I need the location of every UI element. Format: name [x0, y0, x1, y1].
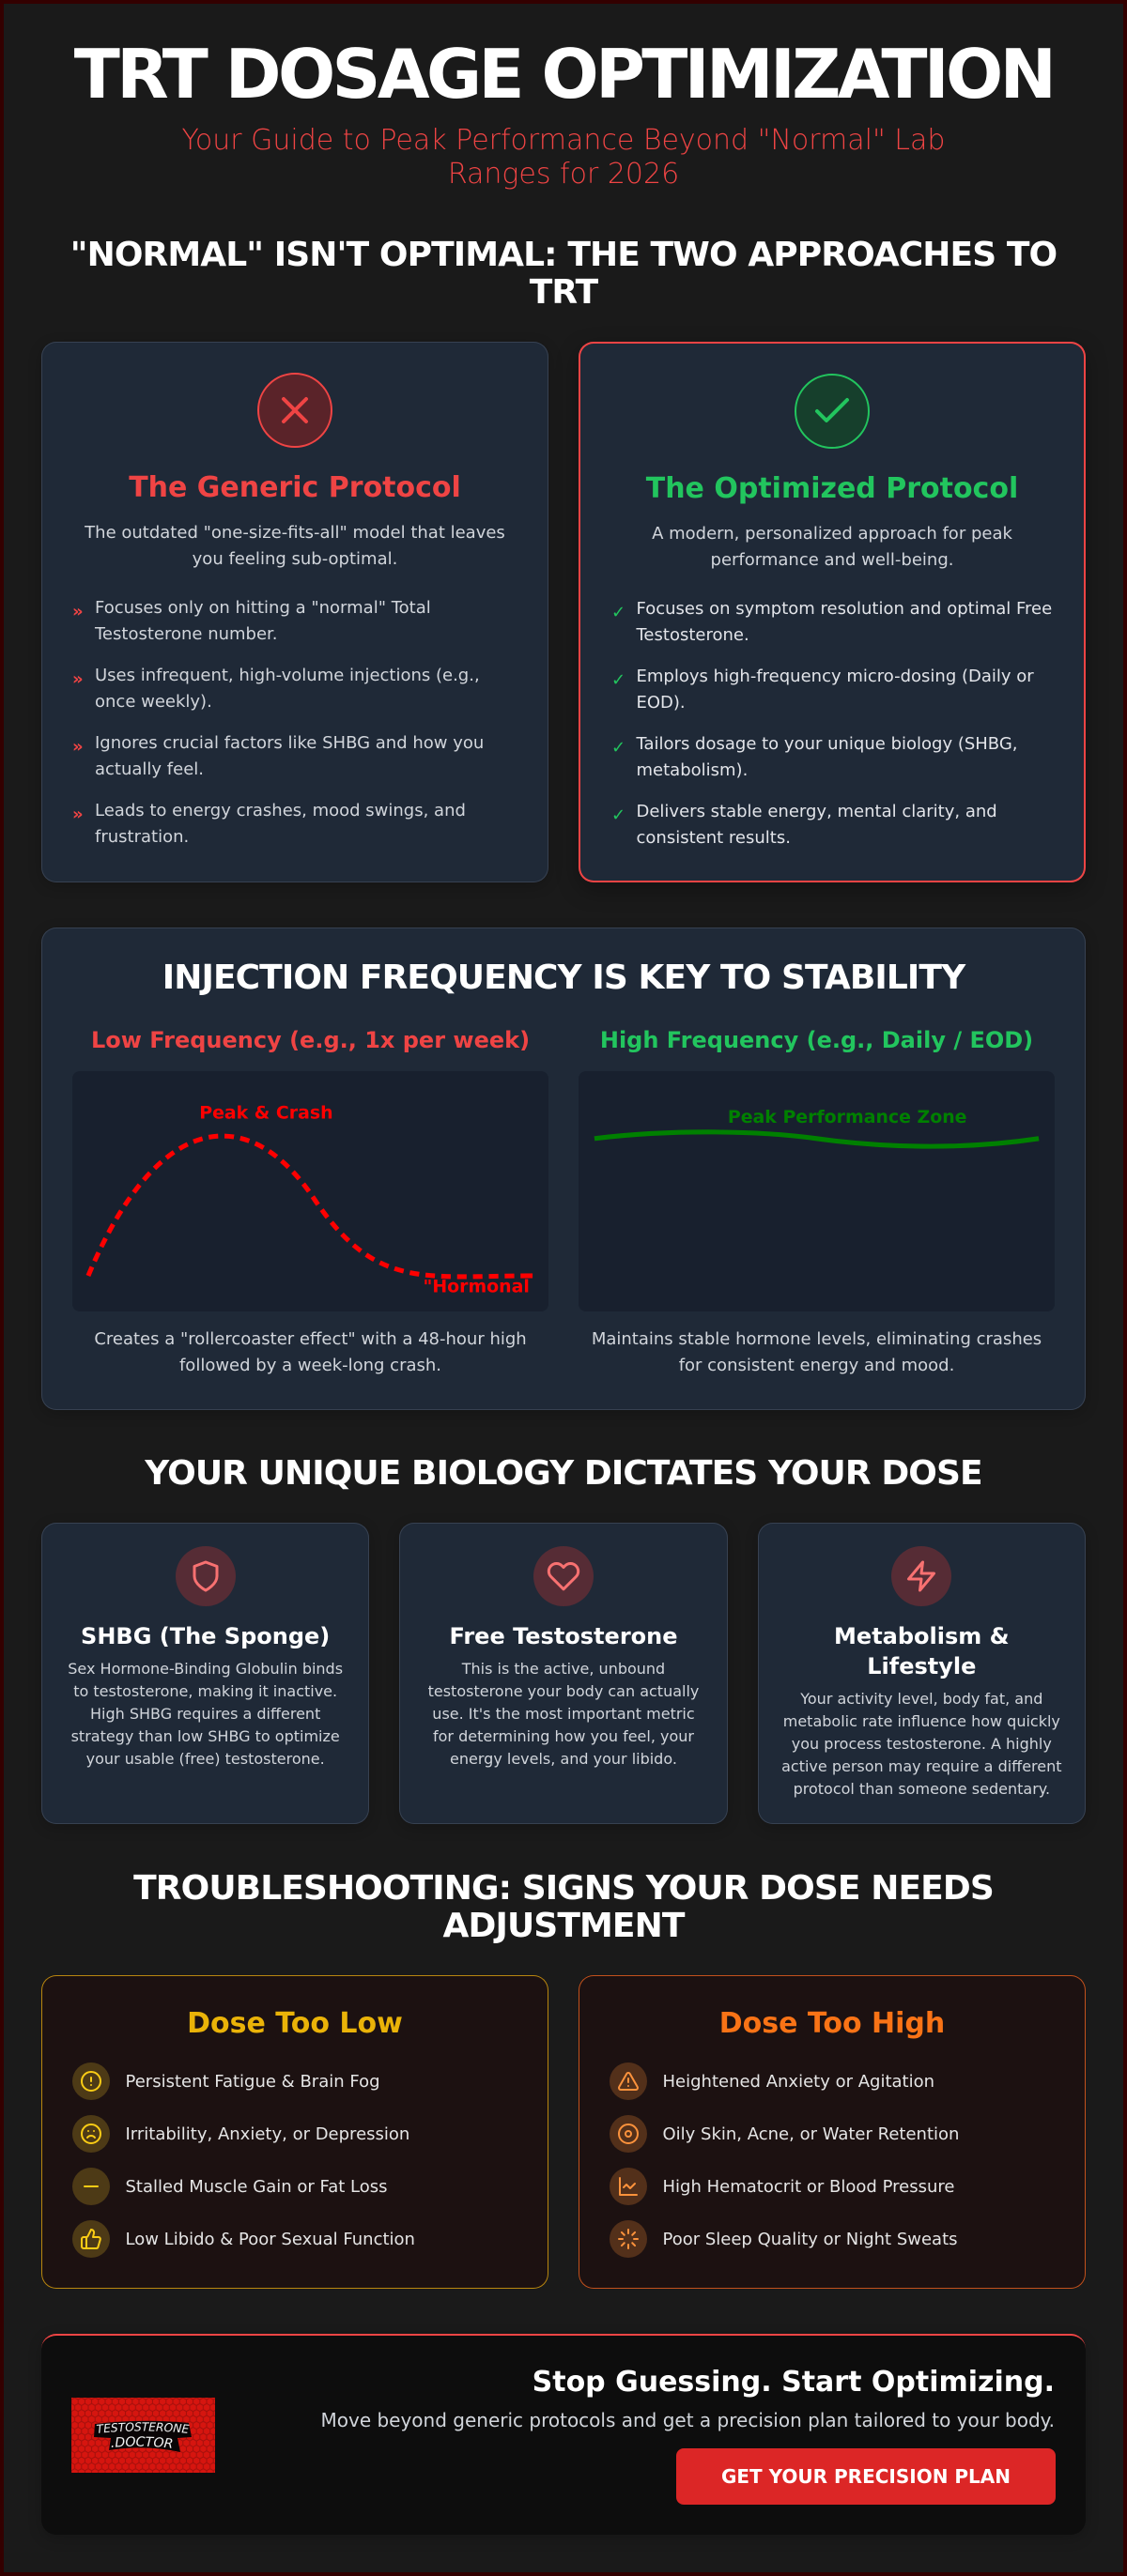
symptom: hematocrit: High Hematocrit or Blood Pressure	[663, 2177, 954, 2197]
caption: low frequency	[94, 1329, 527, 1375]
panel: free testosterone	[399, 1523, 728, 1824]
check 4	[611, 802, 997, 848]
text: metabolism	[781, 1690, 1062, 1798]
caption: low frequency: Creates a "rollercoaster effect" with a 48-hour high	[94, 1329, 527, 1349]
text: SHBG	[68, 1660, 343, 1768]
chart: low frequency peak and crash: Peak & Crash	[199, 1103, 333, 1124]
panel: call to action	[41, 2334, 1086, 2535]
text: SHBG: High SHBG requires a different	[90, 1705, 320, 1723]
heading: dose too high: Dose Too High	[719, 2007, 945, 2040]
button: get your precision plan: GET YOUR PRECISION PLAN	[721, 2465, 1011, 2488]
icon: frown	[72, 2115, 110, 2153]
bullet 1: Focuses only on hitting a "normal" Total	[95, 598, 431, 618]
logo: testosterone doctor: TESTOSTERONE	[96, 2422, 190, 2433]
text: free testosterone: energy levels, and your libido.	[450, 1750, 677, 1768]
heading: high frequency: High Frequency (e.g., Daily / EOD)	[600, 1027, 1033, 1053]
symptom: fatigue	[72, 2062, 380, 2100]
caption: high frequency: for consistent energy and mood.	[679, 1356, 954, 1375]
check 3: metabolism).	[637, 760, 748, 780]
text: metabolism: active person may require a different	[781, 1757, 1062, 1775]
icon: minus	[72, 2168, 110, 2205]
icon: shield	[176, 1546, 236, 1606]
heading: dose too low: Dose Too Low	[187, 2007, 403, 2040]
check 2	[611, 667, 1034, 713]
icon: disc	[610, 2115, 647, 2153]
symptom: poor sleep: Poor Sleep Quality or Night Sweats	[663, 2230, 958, 2249]
panel: dose too low	[41, 1975, 548, 2289]
check 1	[611, 599, 1052, 645]
heading: two approaches: TRT	[530, 273, 597, 312]
subtitle: Ranges for 2026	[448, 158, 679, 191]
check 1: Focuses on symptom resolution and optimal Free	[637, 599, 1052, 619]
panel: optimized protocol	[579, 342, 1086, 882]
check 1: Testosterone.	[637, 625, 749, 645]
icon: loader burst	[610, 2220, 647, 2258]
check 2: EOD).	[637, 693, 686, 713]
check 3	[611, 734, 1018, 780]
symptom: hematocrit	[610, 2168, 954, 2205]
check 1: ✓	[611, 603, 625, 622]
check 4: consistent results.	[637, 828, 791, 848]
bullet 2	[72, 666, 480, 712]
description: generic protocol: The outdated "one-size-fits-all" model that leaves	[85, 523, 505, 543]
check 4: Delivers stable energy, mental clarity, and	[637, 802, 997, 821]
heading: troubleshooting: TROUBLESHOOTING: SIGNS YOUR DOSE NEEDS	[133, 1869, 994, 1908]
heading: metabolism	[834, 1623, 1010, 1679]
heading: generic protocol: The Generic Protocol	[129, 471, 461, 503]
text: SHBG: Sex Hormone-Binding Globulin binds	[68, 1660, 343, 1678]
symptom: irritability	[72, 2115, 409, 2153]
icon: thumbs up	[72, 2220, 110, 2258]
heading: troubleshooting	[133, 1869, 994, 1945]
list: optimized protocol points	[611, 599, 1052, 848]
description: generic protocol: you feeling sub-optimal.	[193, 549, 397, 569]
panel: metabolism	[758, 1523, 1086, 1824]
symptom: anxiety	[610, 2062, 934, 2100]
bullet 1: »	[72, 602, 84, 621]
heading: metabolism: Lifestyle	[867, 1653, 976, 1679]
logo: testosterone doctor	[71, 2398, 215, 2473]
bullet 3	[72, 733, 484, 779]
panel: generic protocol	[41, 342, 548, 882]
heading: optimized protocol: The Optimized Protocol	[646, 471, 1018, 505]
icon: red cross	[257, 373, 332, 448]
symptom: oily skin: Oily Skin, Acne, or Water Retention	[663, 2124, 959, 2144]
symptom: fatigue: Persistent Fatigue & Brain Fog	[126, 2072, 380, 2092]
heading: SHBG: SHBG (The Sponge)	[81, 1623, 330, 1649]
check 2: ✓	[611, 670, 625, 690]
description: optimized protocol: A modern, personalized approach for peak	[652, 524, 1012, 544]
bullet 4: »	[72, 805, 84, 824]
heading: two approaches: "NORMAL" ISN'T OPTIMAL: THE TWO APPROACHES TO	[70, 236, 1057, 274]
heading: call to action: Stop Guessing. Start Optimizing.	[533, 2366, 1055, 2399]
bullet 4: frustration.	[95, 827, 189, 847]
text: metabolism: metabolic rate influence how quickly	[783, 1712, 1060, 1730]
panel: injection frequency	[41, 928, 1086, 1410]
icon: alert circle	[72, 2062, 110, 2100]
heading: low frequency: Low Frequency (e.g., 1x per week)	[91, 1027, 530, 1053]
panel: SHBG	[41, 1523, 369, 1824]
text: free testosterone	[428, 1660, 699, 1768]
symptom: low libido	[72, 2220, 415, 2258]
text: metabolism: you process testosterone. A highly	[792, 1735, 1052, 1753]
bullet 4	[72, 801, 466, 847]
symptom: oily skin	[610, 2115, 959, 2153]
icon: warning triangle	[610, 2062, 647, 2100]
symptom: low libido: Low Libido & Poor Sexual Function	[126, 2230, 415, 2249]
title: TRT DOSAGE OPTIMIZATION	[74, 35, 1053, 114]
list: generic protocol points	[72, 598, 484, 847]
bullet 3: actually feel.	[95, 759, 204, 779]
check 4: ✓	[611, 805, 625, 825]
subtitle	[182, 124, 945, 191]
symptom: irritability: Irritability, Anxiety, or Depression	[126, 2124, 409, 2144]
heading: unique biology: YOUR UNIQUE BIOLOGY DICTATES YOUR DOSE	[145, 1454, 982, 1493]
description: generic protocol	[85, 523, 505, 569]
symptom: anxiety: Heightened Anxiety or Agitation	[663, 2072, 934, 2092]
text: call to action: Move beyond generic protocols and get a precision plan tailored to your body.	[320, 2409, 1055, 2431]
chart: low frequency peak and crash	[72, 1071, 548, 1311]
check 3: Tailors dosage to your unique biology (SHBG,	[637, 734, 1018, 754]
icon: heart	[533, 1546, 594, 1606]
caption: high frequency	[592, 1329, 1042, 1375]
heading: metabolism: Metabolism &	[834, 1623, 1010, 1649]
symptom: stalled gain: Stalled Muscle Gain or Fat Loss	[126, 2177, 387, 2197]
heading: two approaches	[70, 236, 1057, 312]
caption: low frequency: followed by a week-long crash.	[179, 1356, 441, 1375]
text: metabolism: Your activity level, body fat, and	[800, 1690, 1042, 1708]
text: free testosterone: testosterone your body can actually	[428, 1682, 699, 1700]
heading: free testosterone: Free Testosterone	[449, 1623, 678, 1649]
button: get your precision plan	[676, 2448, 1056, 2505]
text: metabolism: protocol than someone sedentary.	[794, 1780, 1050, 1798]
bullet 1	[72, 598, 431, 644]
bullet 2: Uses infrequent, high-volume injections (e.g.,	[95, 666, 480, 685]
panel: dose too high	[579, 1975, 1086, 2289]
text: SHBG: strategy than low SHBG to optimize	[71, 1727, 340, 1745]
chart: low frequency peak and crash: "Hormonal	[423, 1277, 530, 1297]
text: free testosterone: This is the active, unbound	[462, 1660, 665, 1678]
text: free testosterone: use. It's the most important metric	[432, 1705, 695, 1723]
bullet 3: »	[72, 737, 84, 757]
description: optimized protocol	[652, 524, 1012, 570]
icon: green check	[795, 374, 870, 449]
bullet 2: »	[72, 669, 84, 689]
icon: line chart	[610, 2168, 647, 2205]
bullet 4: Leads to energy crashes, mood swings, and	[95, 801, 466, 820]
text: SHBG: your usable (free) testosterone.	[86, 1750, 325, 1768]
chart: high frequency stable line	[579, 1071, 1055, 1311]
heading: troubleshooting: ADJUSTMENT	[443, 1907, 684, 1945]
text: free testosterone: for determining how you feel, your	[433, 1727, 694, 1745]
heading: injection frequency: INJECTION FREQUENCY IS KEY TO STABILITY	[162, 958, 965, 997]
bullet 2: once weekly).	[95, 692, 212, 712]
text: SHBG: to testosterone, making it inactive.	[73, 1682, 337, 1700]
check 3: ✓	[611, 738, 625, 758]
symptom: stalled gain	[72, 2168, 387, 2205]
icon: lightning bolt	[891, 1546, 951, 1606]
description: optimized protocol: performance and well-being.	[711, 550, 953, 570]
bullet 3: Ignores crucial factors like SHBG and how you	[95, 733, 484, 753]
caption: high frequency: Maintains stable hormone levels, eliminating crashes	[592, 1329, 1042, 1349]
symptom: poor sleep	[610, 2220, 958, 2258]
subtitle: Your Guide to Peak Performance Beyond "Normal" Lab	[182, 124, 945, 157]
check 2: Employs high-frequency micro-dosing (Daily or	[637, 667, 1034, 686]
bullet 1: Testosterone number.	[95, 624, 278, 644]
chart: high frequency stable line: Peak Performance Zone	[728, 1107, 967, 1127]
logo: testosterone doctor: .DOCTOR	[111, 2436, 173, 2448]
